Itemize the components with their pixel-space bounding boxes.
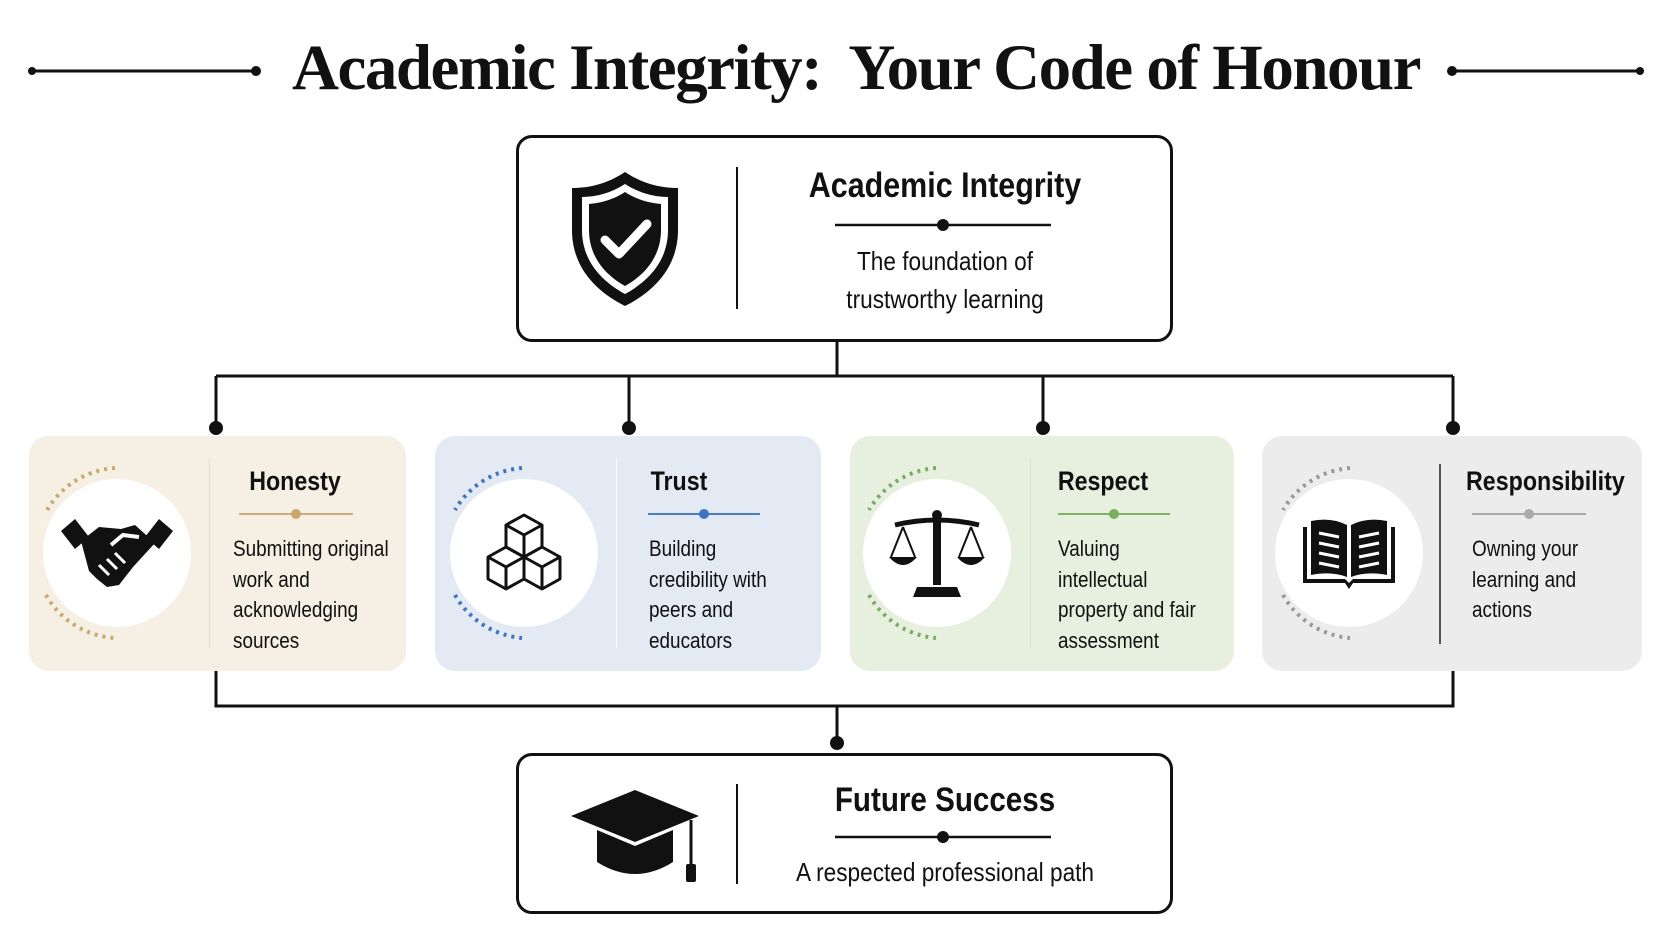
text	[1058, 536, 1196, 652]
text: trustworthy learning	[846, 284, 1044, 314]
text	[846, 246, 1044, 314]
icon: cubes	[450, 479, 598, 627]
text: A respected professional path	[796, 857, 1094, 887]
heading: Respect	[1058, 466, 1148, 496]
panel: academic integrity	[516, 135, 1173, 342]
icon: handshake	[43, 479, 191, 627]
text: property and fair	[1058, 597, 1196, 622]
heading: Future Success	[835, 781, 1055, 819]
text: educators	[649, 628, 732, 652]
text: credibility with	[649, 566, 767, 592]
icon: book	[1275, 479, 1423, 627]
text: work and	[233, 566, 310, 592]
heading: Trust	[651, 466, 707, 496]
text: The foundation of	[857, 246, 1033, 276]
icon: graduation cap	[571, 790, 699, 882]
text: Submitting original	[233, 536, 389, 561]
icon: scales	[863, 479, 1011, 627]
text: peers and	[649, 597, 733, 622]
heading: Responsibility	[1466, 466, 1625, 496]
text: Valuing	[1058, 536, 1120, 561]
text: sources	[233, 628, 299, 652]
panel: trust	[435, 436, 821, 671]
text	[649, 536, 767, 652]
text: actions	[1472, 597, 1532, 622]
text: intellectual	[1058, 566, 1147, 592]
panel: honesty	[29, 436, 406, 671]
text: learning and	[1472, 566, 1576, 592]
panel: responsibility	[1262, 436, 1642, 671]
heading: Academic Integrity	[809, 166, 1081, 205]
text: assessment	[1058, 628, 1159, 652]
panel: respect	[850, 436, 1234, 671]
icon: shield	[572, 172, 678, 306]
text: Building	[649, 536, 716, 561]
text: acknowledging	[233, 597, 358, 622]
text	[1472, 536, 1578, 622]
title: Academic Integrity: Your Code of Honour	[292, 32, 1420, 104]
text	[233, 536, 389, 652]
text: Owning your	[1472, 536, 1578, 561]
heading: Honesty	[249, 466, 341, 496]
title	[28, 32, 1644, 104]
panel: future success	[516, 753, 1173, 914]
